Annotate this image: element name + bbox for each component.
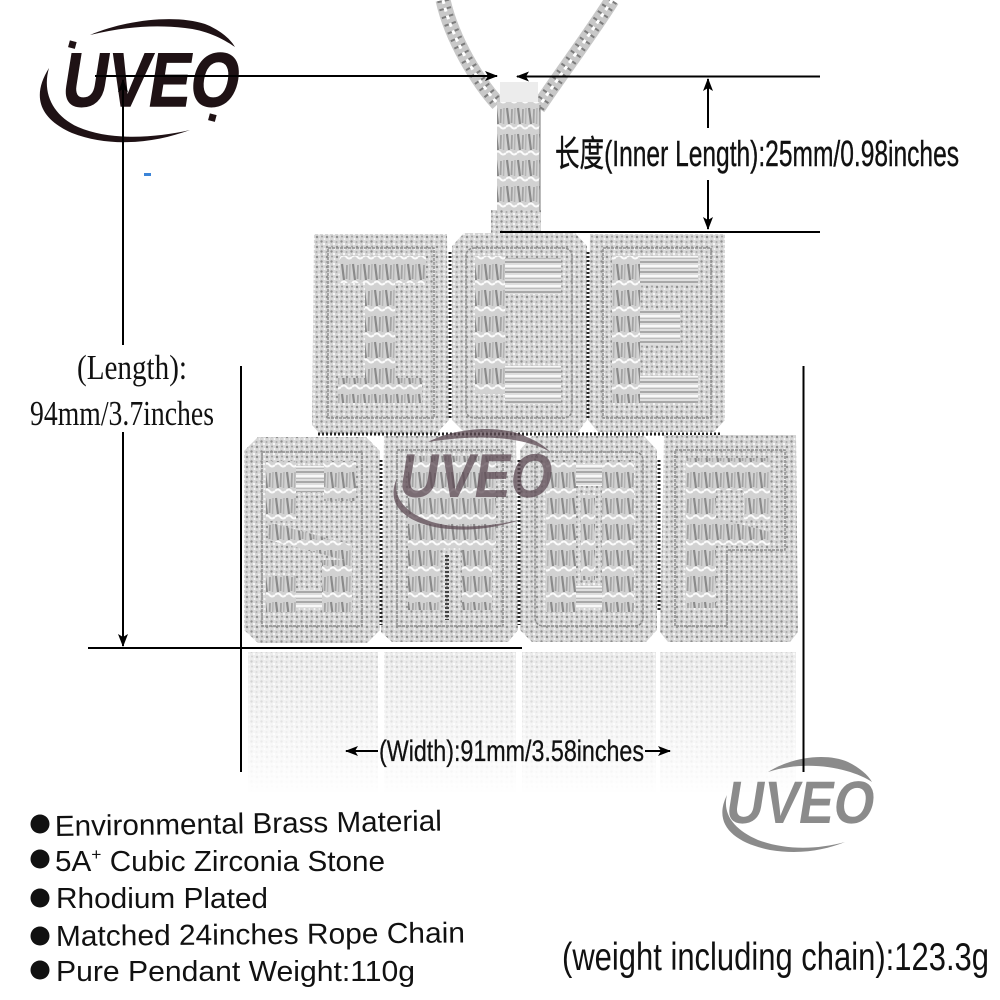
plate seams [381, 460, 659, 625]
plate: letter E [588, 234, 725, 432]
icon: small blue mark [144, 173, 151, 176]
spec: chain: Matched 24inches Rope Chain [56, 917, 465, 953]
plate: letter S [244, 437, 380, 643]
spec: material: Environmental Brass Material [55, 806, 442, 843]
spec: stone: Cubic Zirconia Stone [101, 846, 385, 878]
logo: UVEO top left: UVEO [57, 38, 247, 123]
label: width with arrows: (Width):91mm/3.58inches [379, 735, 644, 768]
icon: pendant bail [491, 82, 541, 234]
spec: stone: 5A [55, 846, 90, 878]
spec: plating: Rhodium Plated [56, 883, 268, 915]
plate seams [318, 252, 720, 434]
icon: rope chain [443, 0, 612, 108]
pendant: lower row letters STOP [244, 435, 798, 643]
dimension: top width arrows [95, 75, 820, 78]
plate: letter C [452, 233, 587, 432]
label: length value: 94mm/3.7inches [30, 394, 214, 433]
dimension: total length arrow [88, 80, 522, 648]
label: length: (Length): [77, 348, 187, 387]
plate: letter I [312, 234, 449, 434]
pendant reflection [240, 650, 802, 795]
logo: UVEO centre watermark [394, 429, 559, 530]
plate: letter O [520, 436, 657, 642]
logo: UVEO top left [40, 19, 247, 142]
plate: letter T [381, 436, 518, 642]
logo: UVEO bottom right watermark: UVEO [722, 768, 881, 836]
spec: stone: + [91, 845, 102, 864]
dimension: width guide lines [241, 366, 804, 772]
logo: UVEO centre watermark: UVEO [395, 442, 559, 511]
dimension: inner length arrow [500, 79, 820, 232]
logo: UVEO bottom right watermark [722, 757, 881, 852]
spec: weight: Pure Pendant Weight:110g [56, 956, 415, 988]
plate: letter P [660, 435, 798, 642]
list: specifications [30, 806, 465, 988]
pendant: upper row letters ICE [312, 233, 725, 434]
